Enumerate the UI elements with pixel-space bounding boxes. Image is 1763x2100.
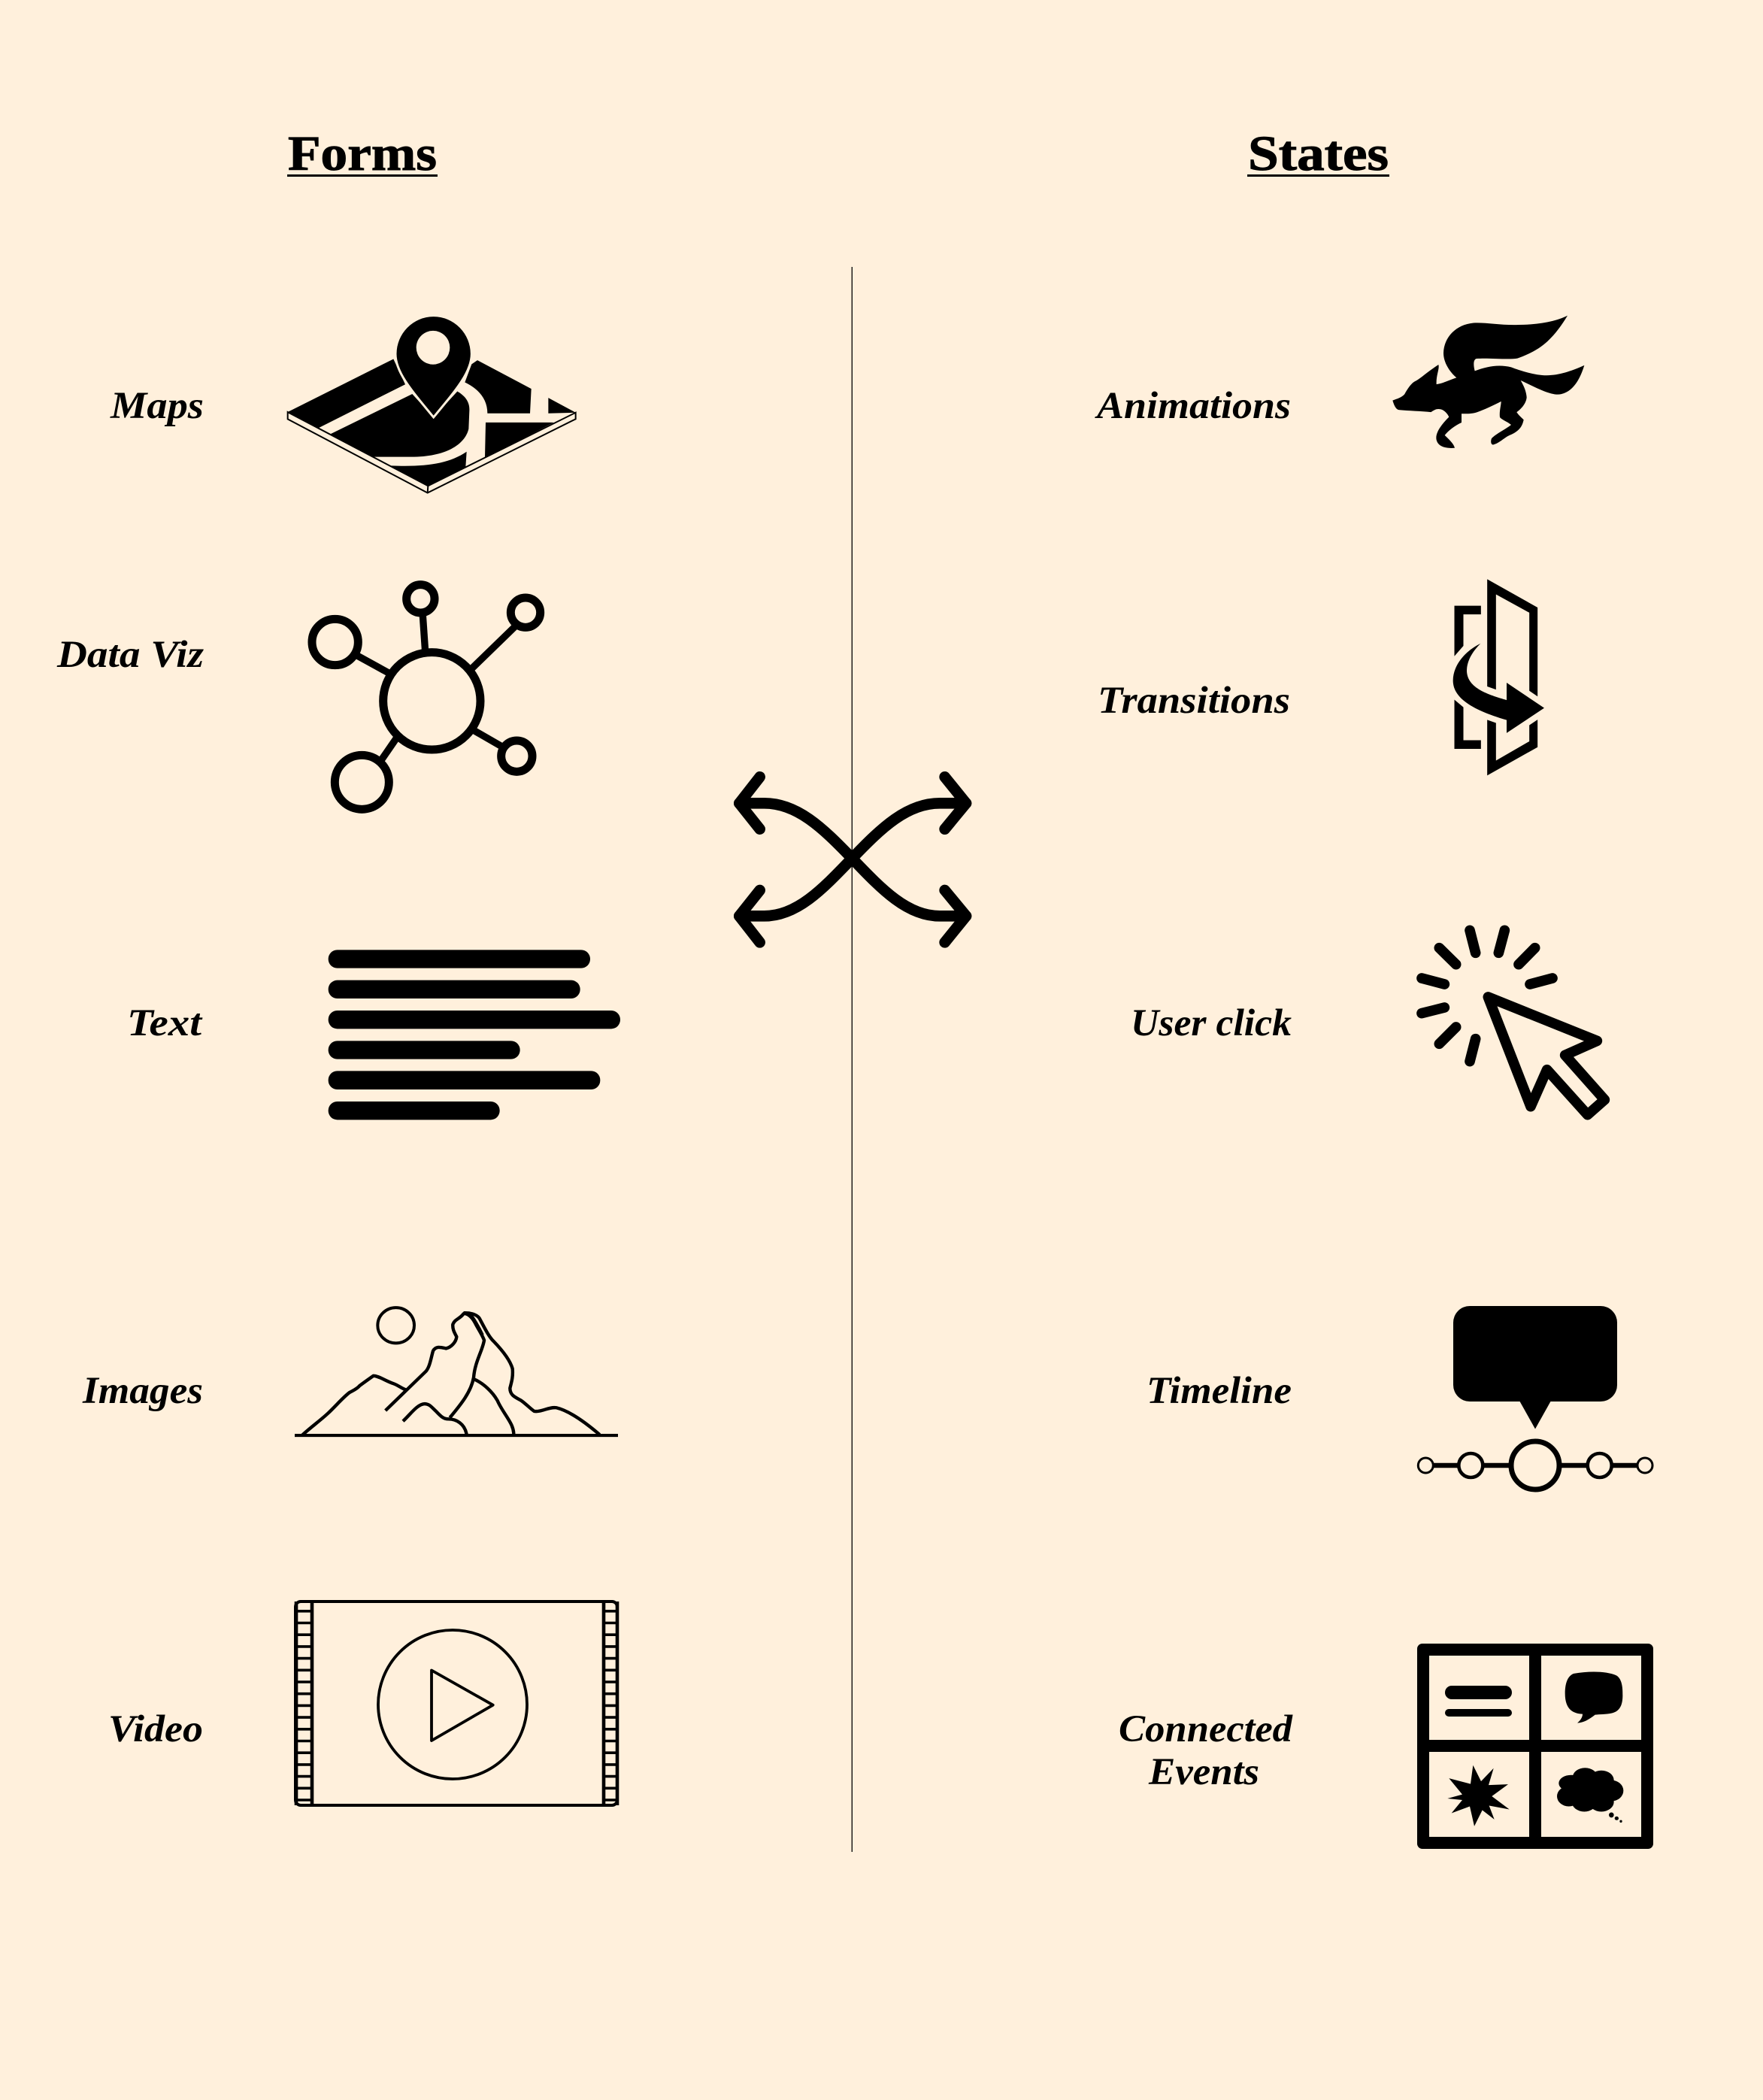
label: Data Viz: Data Viz	[56, 634, 204, 676]
center divider line	[851, 267, 853, 1852]
icon: connected events comic panels	[1417, 1644, 1653, 1849]
label: Connected Events: Events	[1148, 1751, 1259, 1793]
label: Images: Images	[82, 1370, 203, 1412]
icon: isometric map with pin	[288, 316, 576, 492]
label: Connected Events: Connected	[1119, 1708, 1294, 1750]
icon: clicking cursor	[1422, 930, 1604, 1115]
label: Animations: Animations	[1095, 385, 1291, 427]
label: Timeline: Timeline	[1147, 1370, 1292, 1412]
label: User click: User click	[1131, 1002, 1292, 1044]
icon: video film frame with play button	[295, 1602, 617, 1805]
label: Maps: Maps	[110, 385, 204, 427]
icon: running fox	[1392, 316, 1584, 448]
icon: data viz network	[312, 585, 541, 809]
icon: crossing arrows	[739, 777, 966, 942]
label: Video: Video	[108, 1708, 203, 1750]
heading: States: States	[1248, 126, 1389, 181]
label: Text: Text	[127, 1002, 203, 1044]
icon: transition door with curved arrow	[1453, 580, 1544, 774]
icon: mountains image	[295, 1308, 618, 1435]
label: Transitions: Transitions	[1098, 680, 1290, 722]
icon: timeline with callout	[1418, 1306, 1652, 1489]
label: Connected Events	[1119, 1708, 1294, 1793]
icon: text lines	[329, 950, 620, 1120]
heading: Forms: Forms	[288, 126, 437, 181]
